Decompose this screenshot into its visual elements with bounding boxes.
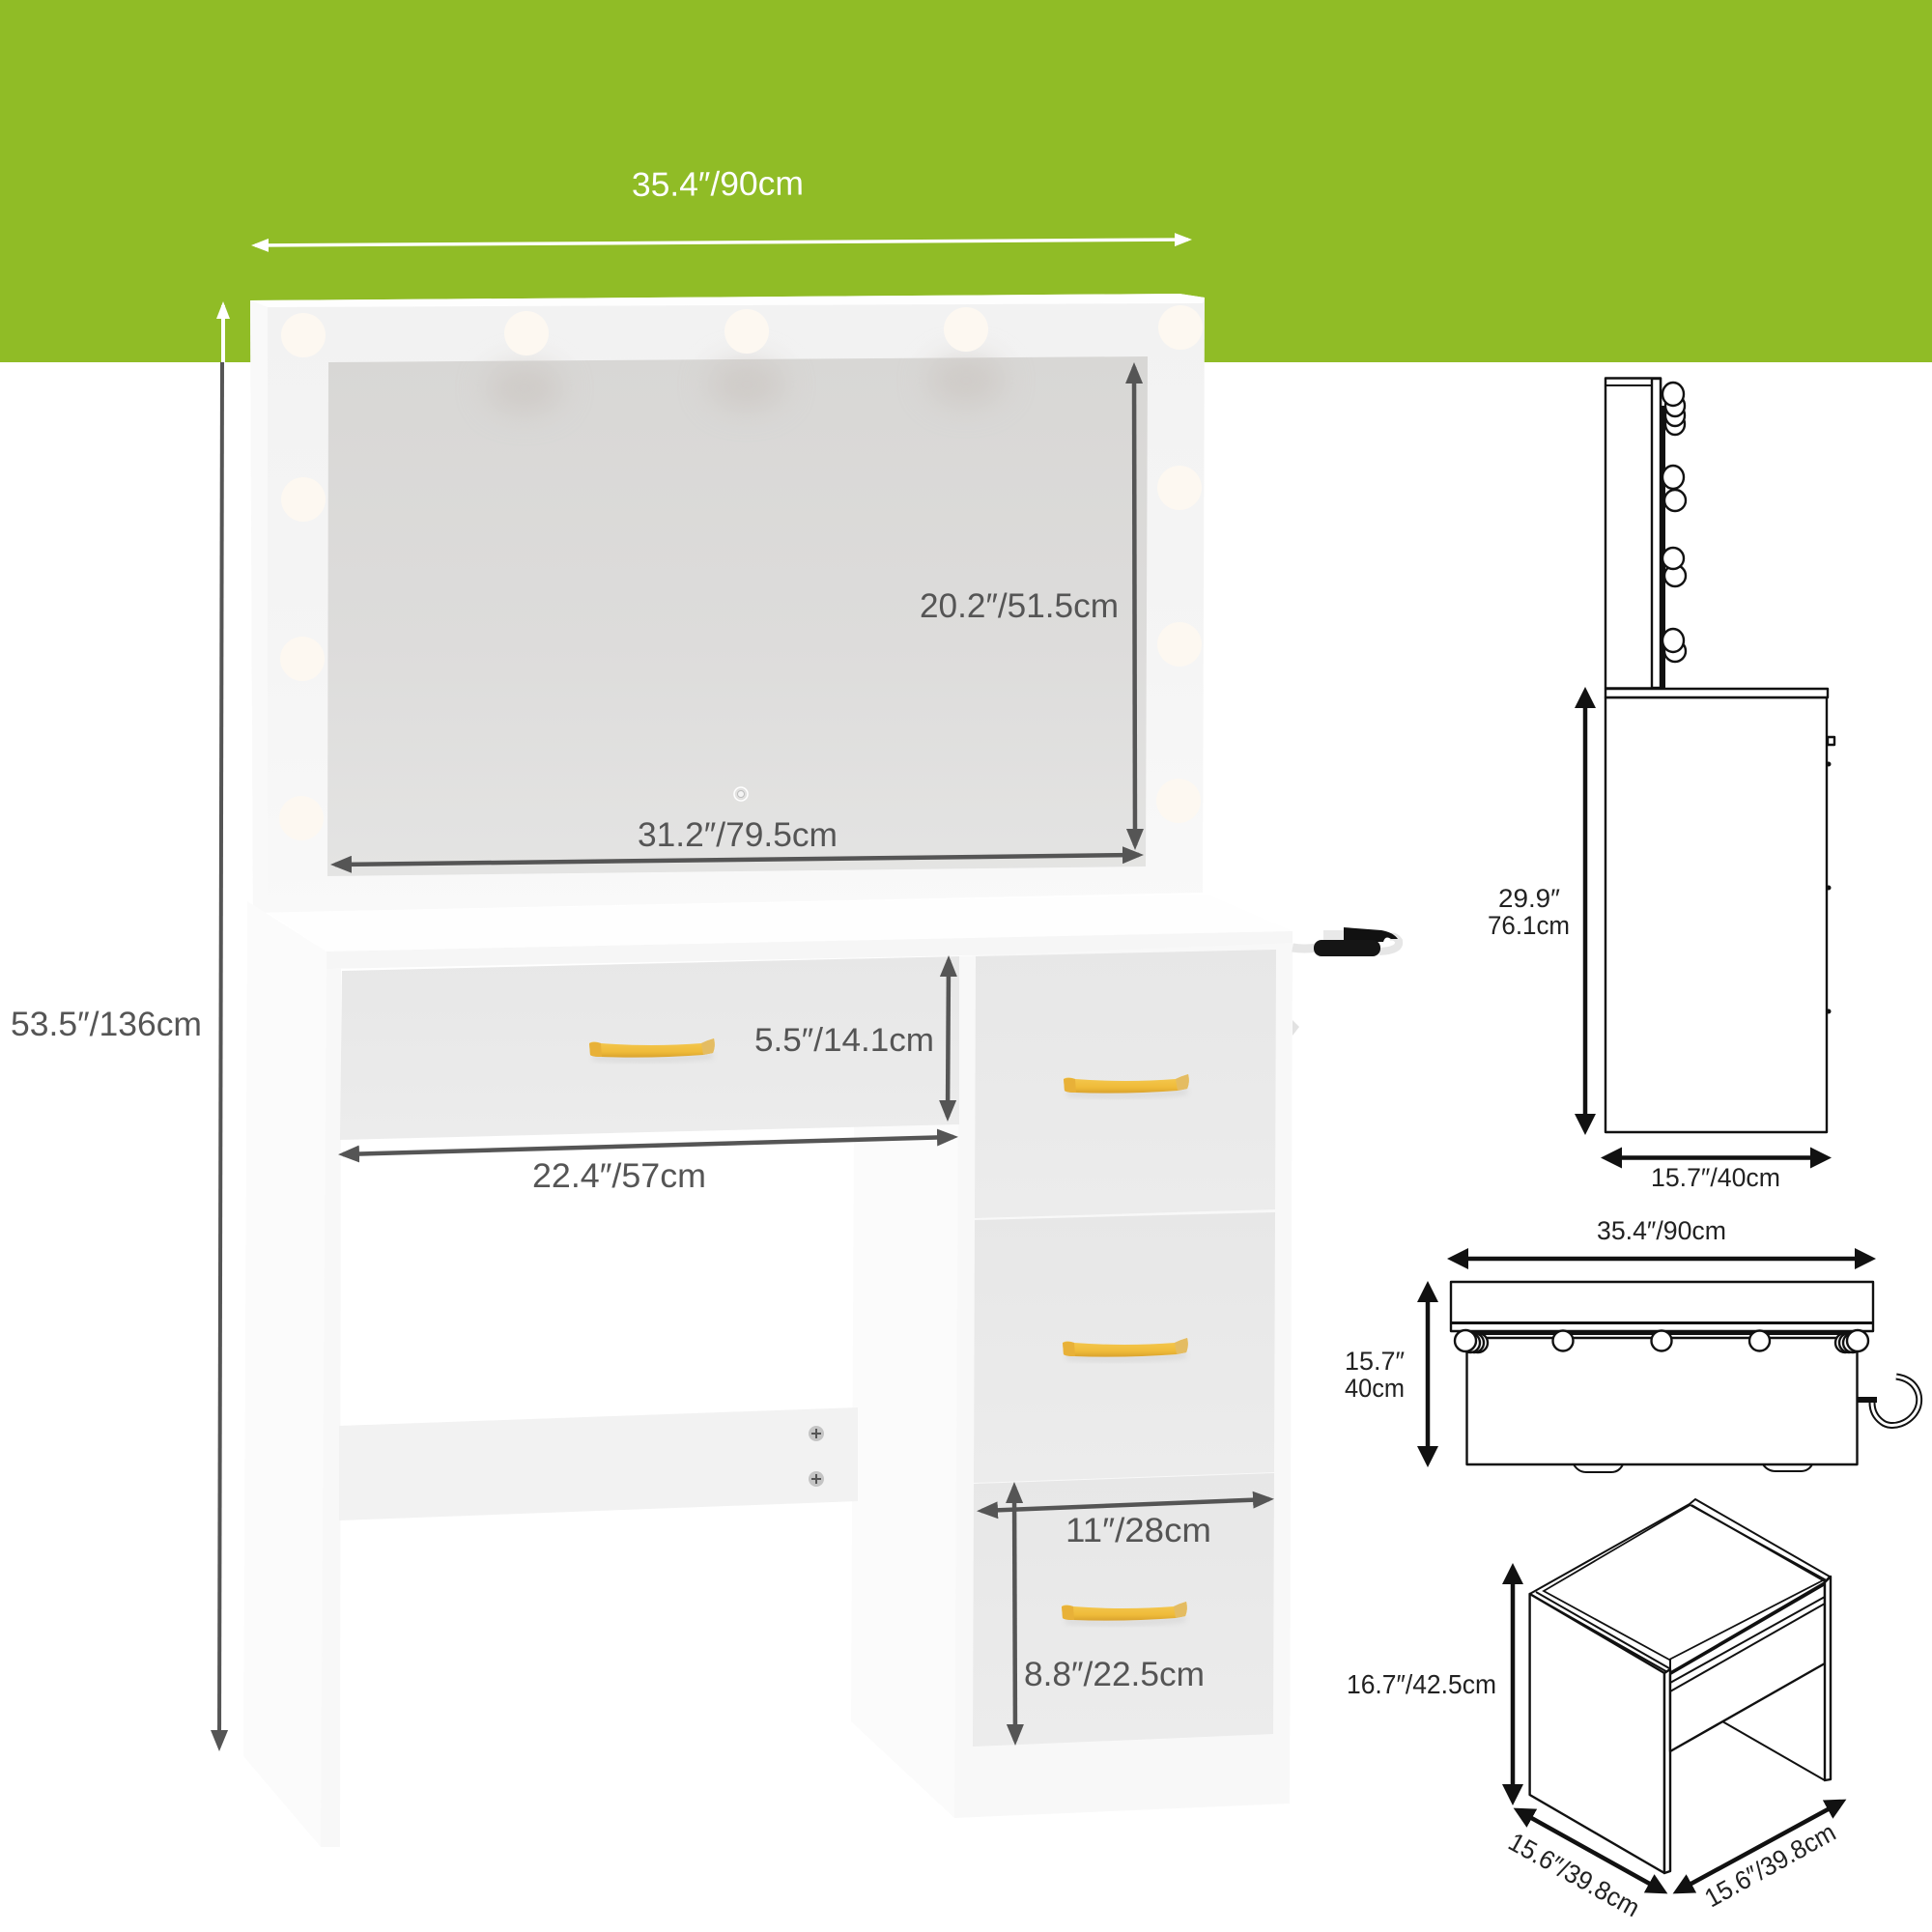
top view cord hook [1858, 1377, 1919, 1426]
side view mirror [1605, 379, 1665, 688]
top view depth dimension: 40cm [1345, 1374, 1405, 1403]
dimension: lower drawer height: 8.8″/22.5cm [1024, 1656, 1205, 1693]
vanity desk illustration [243, 294, 1399, 1847]
right drawer 2 [974, 1212, 1275, 1483]
side view depth dimension: 15.7″/40cm [1651, 1163, 1780, 1192]
dimension: top drawer width: 22.4″/57cm [532, 1157, 706, 1195]
right drawer 3 [973, 1473, 1274, 1747]
top view drawing [1345, 1216, 1919, 1472]
dimension: overall height: 53.5″/136cm [11, 1005, 202, 1043]
cross bar [339, 1407, 858, 1520]
mirror bulbs [279, 305, 1203, 840]
stool right leg [1722, 1577, 1831, 1780]
side view desk [1605, 689, 1834, 1132]
stool height dimension: 16.7″/42.5cm [1347, 1669, 1496, 1699]
stool left depth dimension: 15.6″/39.8cm [1504, 1827, 1644, 1922]
dimension: overall width: 35.4″/90cm [632, 164, 804, 204]
mirror frame [250, 294, 1205, 913]
stool top surface [1530, 1499, 1830, 1673]
dimension: mirror height: 20.2″/51.5cm [920, 586, 1119, 625]
dimension: top drawer height: 5.5″/14.1cm [754, 1022, 934, 1059]
dimension: overall height [11, 305, 223, 1747]
drawer column [851, 943, 1293, 1818]
top view depth dimension [1345, 1286, 1428, 1463]
stool front apron [1670, 1584, 1825, 1751]
left leg [243, 901, 341, 1847]
stool right depth dimension: 15.6″/39.8cm [1700, 1817, 1840, 1913]
stool left panel [1530, 1594, 1670, 1873]
top view mirror frame [1451, 1282, 1873, 1335]
stool drawing [1347, 1499, 1842, 1922]
top view desk body [1466, 1338, 1857, 1472]
top view width dimension: 35.4″/90cm [1597, 1216, 1726, 1245]
dimension: mirror width: 31.2″/79.5cm [638, 815, 838, 854]
side view bulbs [1662, 383, 1686, 662]
green header band [0, 0, 1932, 362]
right drawer 1 [975, 950, 1276, 1218]
power cord hook [1293, 927, 1399, 1036]
mirror [327, 355, 1148, 876]
side view height dimension: 29.9″ [1498, 884, 1560, 913]
side view height dimension: 76.1cm [1488, 911, 1570, 940]
desk top [269, 895, 1293, 969]
dimension: top drawer width [343, 1137, 953, 1195]
top view depth dimension: 15.7″ [1345, 1347, 1405, 1376]
side view drawing [1488, 379, 1834, 1192]
dimension: lower drawer width [981, 1499, 1269, 1549]
side view height dimension [1488, 692, 1585, 1130]
dimension: overall width [255, 164, 1188, 245]
dimension: mirror width [335, 815, 1139, 865]
top view bulbs [1455, 1330, 1868, 1352]
dimension: lower drawer width: 11″/28cm [1065, 1512, 1211, 1549]
top drawer [340, 956, 959, 1140]
